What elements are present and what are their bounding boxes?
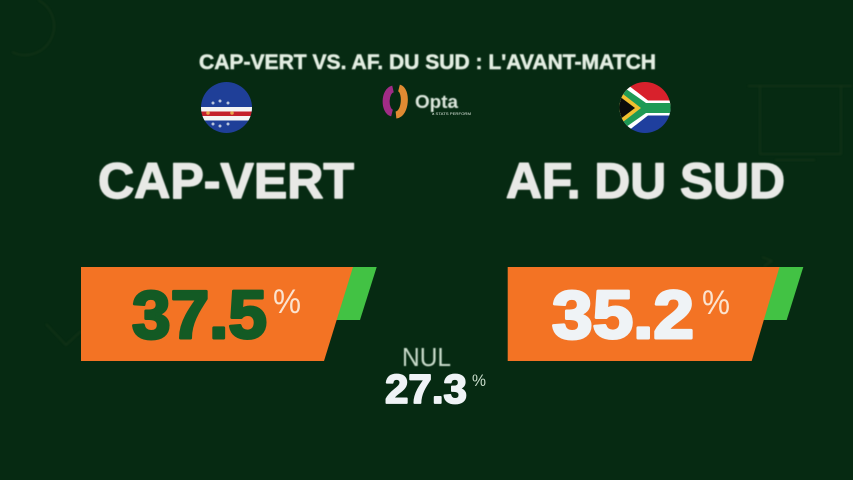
orange bar [81,267,353,361]
green accent [762,267,803,320]
team name: Af. du Sud: AF. DU SUD [506,153,785,209]
green accent [335,267,377,320]
percent sign: % [702,284,730,322]
icon: Opta logo: Opta [415,92,459,112]
icon: Cape Verde flag [200,81,253,134]
panel: Af. du Sud win probability [508,267,803,361]
title: CAP-VERT VS. AF. DU SUD : L'AVANT-MATCH [199,51,656,74]
percent sign: % [273,283,301,321]
team name: Cap-Vert: CAP-VERT [98,153,354,209]
infographic canvas [66,53,842,404]
panel: draw probability [385,342,486,412]
icon: South Africa flag [620,82,670,133]
panel: Cap-Vert win probability [81,267,377,361]
icon: Opta logo [386,88,471,116]
label NUL: NUL [402,342,451,372]
value 35.2: 35.2 [552,277,694,353]
faint background tactical marks [12,0,852,345]
value 37.5: 37.5 [132,277,267,353]
icon: Opta logo: a STATS PERFORM [432,111,471,116]
percent sign: % [472,371,486,390]
orange bar [508,267,780,361]
value 27.3: 27.3 [385,366,467,412]
